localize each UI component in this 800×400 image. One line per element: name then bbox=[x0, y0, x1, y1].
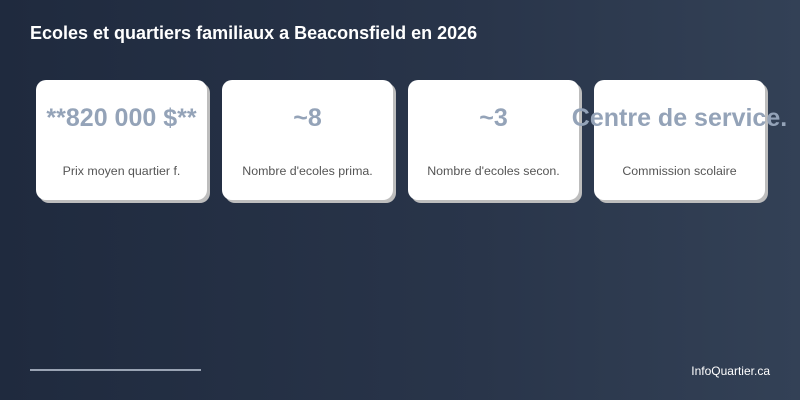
card: ecoles primaires bbox=[222, 80, 393, 200]
card: commission scolaire bbox=[594, 80, 765, 200]
card: ecoles secondaires: Nombre d'ecoles secon. bbox=[427, 164, 560, 178]
card: prix moyen: Prix moyen quartier f. bbox=[63, 164, 180, 178]
title: Ecoles et quartiers familiaux a Beaconsfield en 2026 bbox=[30, 23, 477, 43]
card: ecoles secondaires: ~3 bbox=[479, 104, 508, 132]
card: commission scolaire: Centre de service. bbox=[572, 104, 787, 132]
card: ecoles primaires: Nombre d'ecoles prima. bbox=[242, 164, 373, 178]
card: ecoles secondaires bbox=[408, 80, 579, 200]
footer line bbox=[30, 369, 201, 371]
card: commission scolaire: Commission scolaire bbox=[622, 164, 737, 178]
card: prix moyen: **820 000 $** bbox=[46, 104, 197, 132]
card: ecoles primaires: ~8 bbox=[293, 104, 322, 132]
card: prix moyen bbox=[36, 80, 207, 200]
brand: InfoQuartier.ca bbox=[691, 364, 770, 378]
